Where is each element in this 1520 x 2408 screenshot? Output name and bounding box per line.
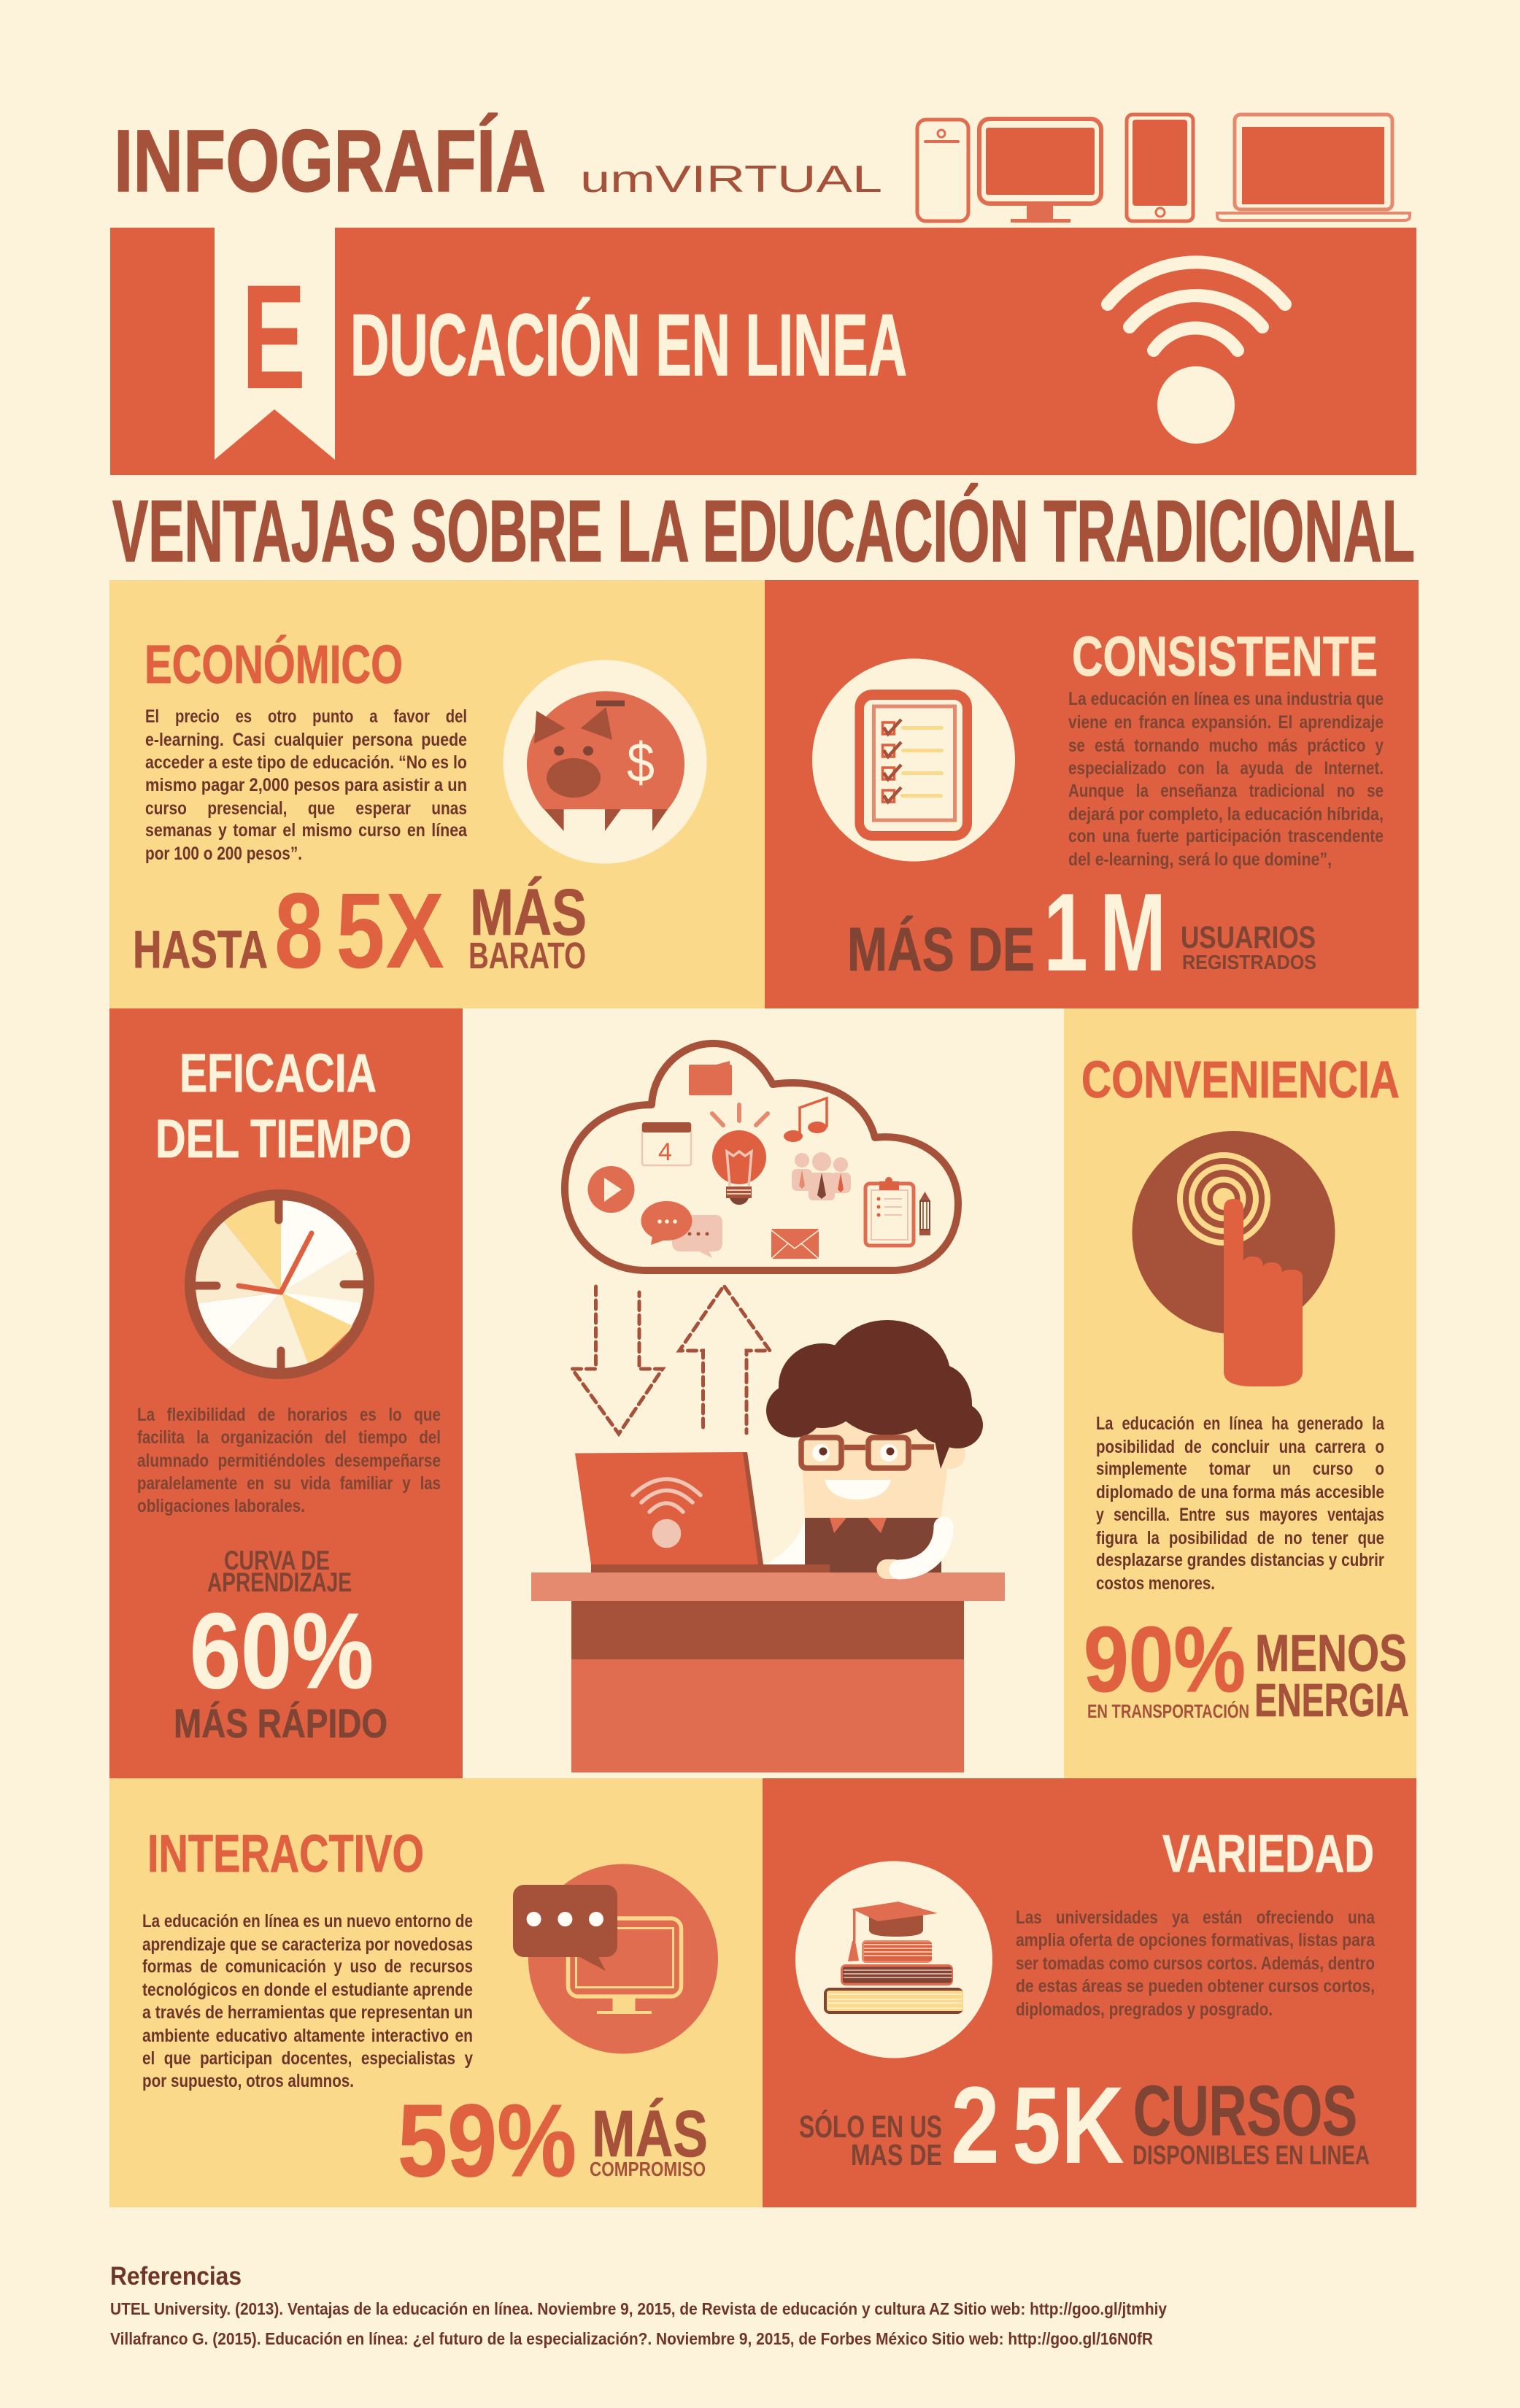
heading: CONSISTENTE bbox=[1072, 625, 1378, 688]
logo: umvirtual: umVIRTUAL bbox=[580, 158, 882, 201]
stat: 25K cursos: CURSOS bbox=[1133, 2071, 1357, 2150]
body text: simplemente tomar un curso o bbox=[1096, 1459, 1384, 1479]
icon: light bulb bbox=[712, 1105, 768, 1205]
icon: wifi signal bbox=[1108, 262, 1285, 437]
stat: más de 1M usuarios registrados: MÁS DE bbox=[847, 915, 1035, 984]
body text: amplia oferta de opciones formativas, listas para bbox=[1016, 1930, 1376, 1950]
icon: calendar: 4 bbox=[658, 1138, 672, 1166]
body text: del e-learning, será lo que domine”, bbox=[1068, 849, 1332, 870]
heading: INTERACTIVO bbox=[147, 1825, 424, 1883]
body text: tecnológicos en donde el estudiante aprende bbox=[142, 1980, 473, 2000]
panel: central illustration bbox=[531, 1043, 1005, 1772]
body text: el que participan docentes, especialistas y bbox=[142, 2048, 473, 2069]
icon: calendar bbox=[642, 1122, 691, 1166]
illustration: desk bbox=[531, 1572, 1005, 1772]
body text: viene en franca expansión. El aprendizaje bbox=[1068, 712, 1384, 733]
body text: con una fuerte participación trascendente bbox=[1068, 826, 1384, 846]
icon: laptop wifi bbox=[633, 1479, 701, 1545]
body text: formas de comunicación y uso de recursos bbox=[142, 1956, 473, 1977]
arrow: upload dashed bbox=[679, 1286, 770, 1433]
icons: devices bbox=[917, 115, 1410, 223]
stat: más de 1M usuarios registrados bbox=[847, 871, 1316, 995]
heading: VARIEDAD bbox=[1162, 1825, 1374, 1883]
body text: dejará por completo, la educación híbrida, bbox=[1068, 804, 1384, 825]
body text: aprendizaje que se caracteriza por novedosas bbox=[142, 1934, 473, 1955]
illustration: laptop bbox=[575, 1452, 830, 1572]
references bbox=[110, 2262, 1167, 2348]
body text: diplomados, pregrados y posgrado. bbox=[1016, 1999, 1273, 2020]
stat: 25K cursos bbox=[799, 2064, 1370, 2186]
body text: ser tomadas como cursos cortos. Además, dentro bbox=[1016, 1953, 1375, 1974]
icon: tablet checklist bbox=[812, 658, 1015, 861]
body text: paralelamente en su vida familiar y las bbox=[137, 1473, 441, 1494]
body text: se está tornando mucho más práctico y bbox=[1068, 736, 1384, 756]
body text: La educación en línea es un nuevo entorno de bbox=[142, 1911, 473, 1932]
icon: monitor chat bbox=[513, 1864, 718, 2053]
cloud outline bbox=[565, 1043, 958, 1270]
body text: desplazarse grandes distancias y cubrir bbox=[1096, 1550, 1384, 1570]
body text: de estas áreas se pueden obtener cursos cortos, bbox=[1016, 1976, 1375, 1996]
body text bbox=[137, 1405, 441, 1516]
stat: 90% menos energía: ENERGIA bbox=[1254, 1674, 1409, 1726]
body text: Las universidades ya están ofreciendo una bbox=[1016, 1907, 1376, 1928]
stat: 90% menos energía bbox=[1084, 1608, 1409, 1726]
body text bbox=[1096, 1413, 1385, 1594]
stat: 59% más compromiso: MÁS bbox=[592, 2097, 708, 2171]
banner heading: DUCACIÓN EN LINEA bbox=[350, 296, 907, 394]
panel: eficacia del tiempo bbox=[109, 1008, 463, 1779]
stat: hasta 85X más barato: MÁS bbox=[470, 876, 587, 949]
body text: posibilidad de concluir una carrera o bbox=[1096, 1437, 1384, 1457]
stat: hasta 85X más barato bbox=[133, 871, 587, 991]
heading: CONVENIENCIA bbox=[1081, 1051, 1400, 1109]
body text bbox=[142, 1911, 473, 2091]
body text: a través de herramientas que representan un bbox=[142, 2002, 473, 2023]
eyes and mouth bbox=[812, 1444, 898, 1500]
icon: books and graduation cap bbox=[795, 1861, 992, 2058]
panel: consistente bbox=[765, 580, 1419, 1008]
body text: y sencilla. Entre sus mayores ventajas bbox=[1096, 1505, 1384, 1525]
stat: 90% menos energía: EN TRANSPORTACIÓN bbox=[1087, 1700, 1249, 1722]
stat: más de 1M usuarios registrados: 1M bbox=[1043, 871, 1166, 995]
icon: folder bbox=[689, 1061, 732, 1095]
glasses bbox=[801, 1438, 934, 1468]
stat: hasta 85X más barato: HASTA bbox=[133, 921, 268, 979]
stat: 60% más rápido: 60% bbox=[190, 1591, 374, 1711]
body text: por 100 o 200 pesos”. bbox=[145, 844, 302, 864]
arrow: download dashed bbox=[572, 1286, 663, 1434]
icon: music notes bbox=[784, 1098, 827, 1142]
heading: EFICACIA bbox=[180, 1043, 377, 1103]
ribbon letter E: E bbox=[242, 254, 306, 420]
body text: diplomado de una forma más accesible bbox=[1096, 1482, 1384, 1502]
stat: 25K cursos: DISPONIBLES EN LINEA bbox=[1133, 2140, 1370, 2170]
panel: interactivo bbox=[109, 1778, 763, 2207]
body text: costos menores. bbox=[1096, 1573, 1215, 1594]
icon: piggy bank: $ bbox=[627, 732, 655, 794]
icon: piggy bank bbox=[504, 660, 706, 864]
heading bbox=[155, 1043, 412, 1169]
icon: envelope bbox=[771, 1229, 819, 1259]
arm and hand bbox=[887, 1527, 944, 1570]
body text: acceder a este tipo de educación. “No es lo bbox=[145, 752, 467, 773]
stat: 60% más rápido bbox=[174, 1545, 387, 1746]
stat: hasta 85X más barato: 85X bbox=[274, 871, 444, 991]
stat: 59% más compromiso: COMPROMISO bbox=[590, 2158, 706, 2180]
stat: más de 1M usuarios registrados: USUARIOS bbox=[1181, 920, 1316, 955]
stat: 60% más rápido: MÁS RÁPIDO bbox=[174, 1700, 387, 1746]
body text: Aunque la enseñanza tradicional no se bbox=[1068, 781, 1384, 801]
panel: económico bbox=[109, 580, 765, 1008]
stat: 25K cursos: MAS DE bbox=[851, 2138, 942, 2172]
body text: La educación en línea es una industria que bbox=[1068, 689, 1384, 709]
body text: La flexibilidad de horarios es lo que bbox=[137, 1405, 441, 1425]
body text bbox=[145, 706, 468, 864]
stat: 59% más compromiso bbox=[398, 2083, 708, 2198]
body text: obligaciones laborales. bbox=[137, 1496, 305, 1516]
stat: más de 1M usuarios registrados: REGISTRADOS bbox=[1182, 951, 1316, 973]
ribbon bookmark bbox=[215, 228, 335, 460]
body text: especializado con la ayuda de Internet. bbox=[1068, 758, 1384, 779]
references: Villafranco G. (2015). Educación en línea: ¿el futuro de la especialización?. Noviembre 9, 2015, de Forbes México Sitio web: http://goo.gl/16N0fR bbox=[110, 2329, 1153, 2348]
references: UTEL University. (2013). Ventajas de la educación en línea. Noviembre 9, 2015, de Revista de educación y cultura AZ Sitio web: http://goo.gl/jtmhiy bbox=[110, 2299, 1167, 2318]
heading: DEL TIEMPO bbox=[155, 1108, 412, 1169]
stat: 90% menos energía: 90% bbox=[1084, 1608, 1246, 1711]
body text: facilita la organización del tiempo del bbox=[137, 1427, 441, 1448]
body text: mismo pagar 2,000 pesos para asistir a un bbox=[145, 775, 467, 795]
references: Referencias bbox=[110, 2262, 242, 2291]
icon: speech bubbles bbox=[641, 1201, 722, 1258]
icon: play button bbox=[588, 1166, 635, 1213]
body text: curso presencial, que esperar unas bbox=[145, 798, 467, 819]
stat: hasta 85X más barato: BARATO bbox=[468, 935, 586, 976]
stat: 90% menos energía: MENOS bbox=[1255, 1625, 1407, 1683]
title: Infografía: INFOGRAFÍA bbox=[114, 111, 546, 210]
icon: clock bbox=[182, 1189, 379, 1379]
banner: educación en línea bbox=[110, 228, 1416, 475]
body text: e-learning. Casi cualquier persona puede bbox=[145, 730, 467, 750]
body text: alumnado permitiéndoles desempeñarse bbox=[137, 1451, 441, 1471]
stat: 60% más rápido: APRENDIZAJE bbox=[207, 1567, 352, 1597]
body text: figura la posibilidad de no tener que bbox=[1096, 1528, 1384, 1548]
icon: clipboard and pencil bbox=[865, 1177, 930, 1246]
body text: El precio es otro punto a favor del bbox=[145, 706, 467, 727]
panel: variedad bbox=[763, 1778, 1416, 2207]
heading: ECONÓMICO bbox=[144, 634, 403, 695]
vest bbox=[805, 1518, 941, 1572]
body text bbox=[1016, 1907, 1376, 2020]
body text: ambiente educativo altamente interactivo en bbox=[142, 2026, 473, 2046]
body text bbox=[1068, 689, 1384, 870]
stat: 25K cursos: 25K bbox=[951, 2064, 1124, 2186]
illustration: person bbox=[764, 1320, 983, 1572]
stat: 60% más rápido: CURVA DE bbox=[224, 1545, 330, 1575]
hair bbox=[766, 1320, 983, 1469]
stat: 59% más compromiso: 59% bbox=[398, 2083, 576, 2198]
icon: people bbox=[792, 1152, 851, 1200]
body text: semanas y tomar el mismo curso en línea bbox=[145, 820, 468, 841]
stat: 25K cursos: SÓLO EN US bbox=[799, 2109, 942, 2145]
body text: La educación en línea ha generado la bbox=[1096, 1413, 1385, 1434]
icon: touch target bbox=[1133, 1131, 1335, 1386]
panel: conveniencia bbox=[1064, 1008, 1416, 1779]
body text: por supuesto, otros alumnos. bbox=[142, 2071, 354, 2091]
